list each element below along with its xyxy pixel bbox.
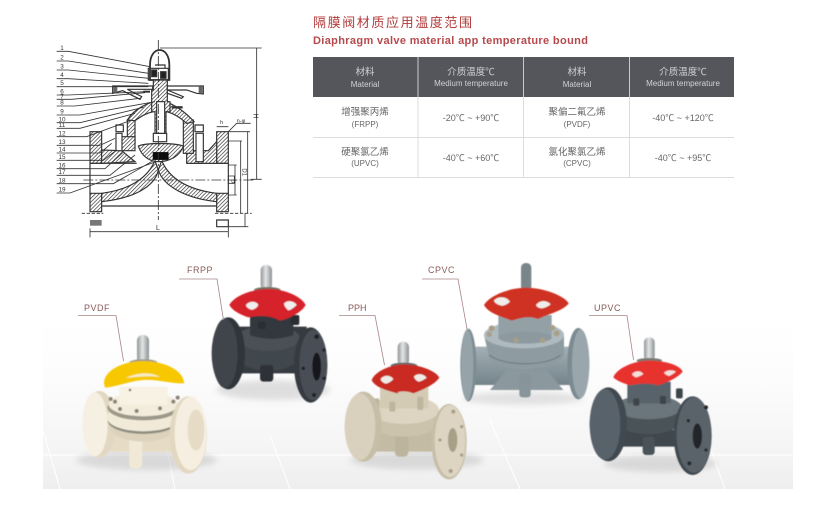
valve: FRPP dark grey with red handwheel xyxy=(212,265,330,403)
callout: FRPP label and leader: FRPP xyxy=(187,265,213,275)
schematic part numbers and leaders: 8 xyxy=(60,100,64,107)
diagram: valve cross-section schematic xyxy=(57,40,262,237)
table header: 材料 xyxy=(355,66,375,78)
schematic part numbers and leaders: 15 xyxy=(58,154,66,161)
table row 1: (PVDF) xyxy=(564,120,591,129)
panel: floor background xyxy=(43,320,793,489)
table header: Medium temperature xyxy=(646,79,720,88)
schematic part numbers and leaders: 6 xyxy=(60,89,64,96)
schematic part numbers and leaders xyxy=(57,45,156,194)
title: Chinese and English heading xyxy=(313,15,588,47)
table row 2: 硬聚氯乙烯 xyxy=(341,146,389,158)
callout: UPVC label and leader xyxy=(589,303,634,360)
schematic part numbers and leaders: 7 xyxy=(60,93,64,100)
table header: 材料 xyxy=(567,66,587,78)
schematic part numbers and leaders: 11 xyxy=(59,122,66,129)
table header: Material xyxy=(563,80,591,89)
schematic part numbers and leaders: 14 xyxy=(58,147,66,154)
table row 2: -40℃ ~ +95℃ xyxy=(655,153,711,163)
table row 2: -40℃ ~ +60℃ xyxy=(443,153,499,163)
table row 1: (FRPP) xyxy=(352,120,379,129)
table row 2: (CPVC) xyxy=(563,159,591,168)
schematic part numbers and leaders: 10 xyxy=(58,116,66,123)
callout: PPH label and leader: PPH xyxy=(348,303,367,313)
schematic dimension letters xyxy=(156,113,258,232)
callout: CPVC label and leader xyxy=(422,265,467,329)
schematic stem and handwheel xyxy=(113,50,203,133)
schematic dimension letters: D1 xyxy=(240,168,246,177)
schematic body xyxy=(90,132,228,227)
schematic dimension letters: H xyxy=(251,113,258,118)
valve: UPVC grey with red handwheel xyxy=(590,337,717,475)
table header xyxy=(313,57,734,97)
table grid lines xyxy=(313,97,734,178)
schematic part numbers and leaders: 19 xyxy=(58,187,66,194)
schematic part numbers and leaders: 9 xyxy=(60,109,64,116)
valve: CPVC grey with red handwheel xyxy=(460,263,589,405)
table row 2: 氯化聚氯乙烯 xyxy=(548,146,606,158)
valve: PPH beige with red handwheel xyxy=(345,342,483,479)
schematic dimension letters: h xyxy=(220,120,223,126)
table header: Material xyxy=(351,80,379,89)
schematic part numbers and leaders: 12 xyxy=(58,130,66,137)
table row 2: (UPVC) xyxy=(351,159,379,168)
schematic bonnet and diaphragm xyxy=(116,102,203,162)
schematic dimension letters: L xyxy=(156,225,160,232)
callout: UPVC label and leader: UPVC xyxy=(594,303,621,313)
table row 1 xyxy=(341,106,714,129)
schematic part numbers and leaders: 2 xyxy=(60,54,64,61)
table row 1: -40℃ ~ +120℃ xyxy=(652,113,714,123)
schematic part numbers and leaders: 13 xyxy=(58,139,66,146)
title: Chinese and English heading: Diaphragm valve material app temperature bound xyxy=(313,35,588,47)
schematic part numbers and leaders: 3 xyxy=(60,63,64,70)
valve: PVDF cream with yellow handwheel xyxy=(77,335,217,474)
schematic part numbers and leaders: 4 xyxy=(60,72,64,79)
schematic part numbers and leaders: 17 xyxy=(58,169,66,176)
table header: Medium temperature xyxy=(434,79,508,88)
table row 1: 增强聚丙烯 xyxy=(341,106,389,118)
table header: 介质温度℃ xyxy=(659,66,707,78)
table: material temperature ranges xyxy=(313,57,734,178)
schematic part numbers and leaders: 16 xyxy=(58,162,66,169)
callout: PVDF label and leader: PVDF xyxy=(84,303,110,313)
table row 1: -20℃ ~ +90℃ xyxy=(443,113,499,123)
callout: FRPP label and leader xyxy=(179,265,224,320)
callout: PVDF label and leader xyxy=(78,303,124,361)
callout: PPH label and leader xyxy=(339,303,384,365)
schematic dimension letters: n-φ xyxy=(237,119,246,125)
schematic part numbers and leaders: 5 xyxy=(60,80,64,87)
schematic part numbers and leaders: 18 xyxy=(58,177,66,184)
schematic part numbers and leaders: 1 xyxy=(60,45,64,52)
table header: 介质温度℃ xyxy=(447,66,495,78)
table row 1: 聚偏二氟乙烯 xyxy=(548,106,606,118)
schematic dimension letters: D xyxy=(229,179,235,183)
callout: CPVC label and leader: CPVC xyxy=(428,265,455,275)
title: Chinese and English heading: 隔膜阀材质应用温度范围 xyxy=(313,15,474,30)
table row 2 xyxy=(341,146,711,168)
schematic dimension lines xyxy=(82,40,262,237)
